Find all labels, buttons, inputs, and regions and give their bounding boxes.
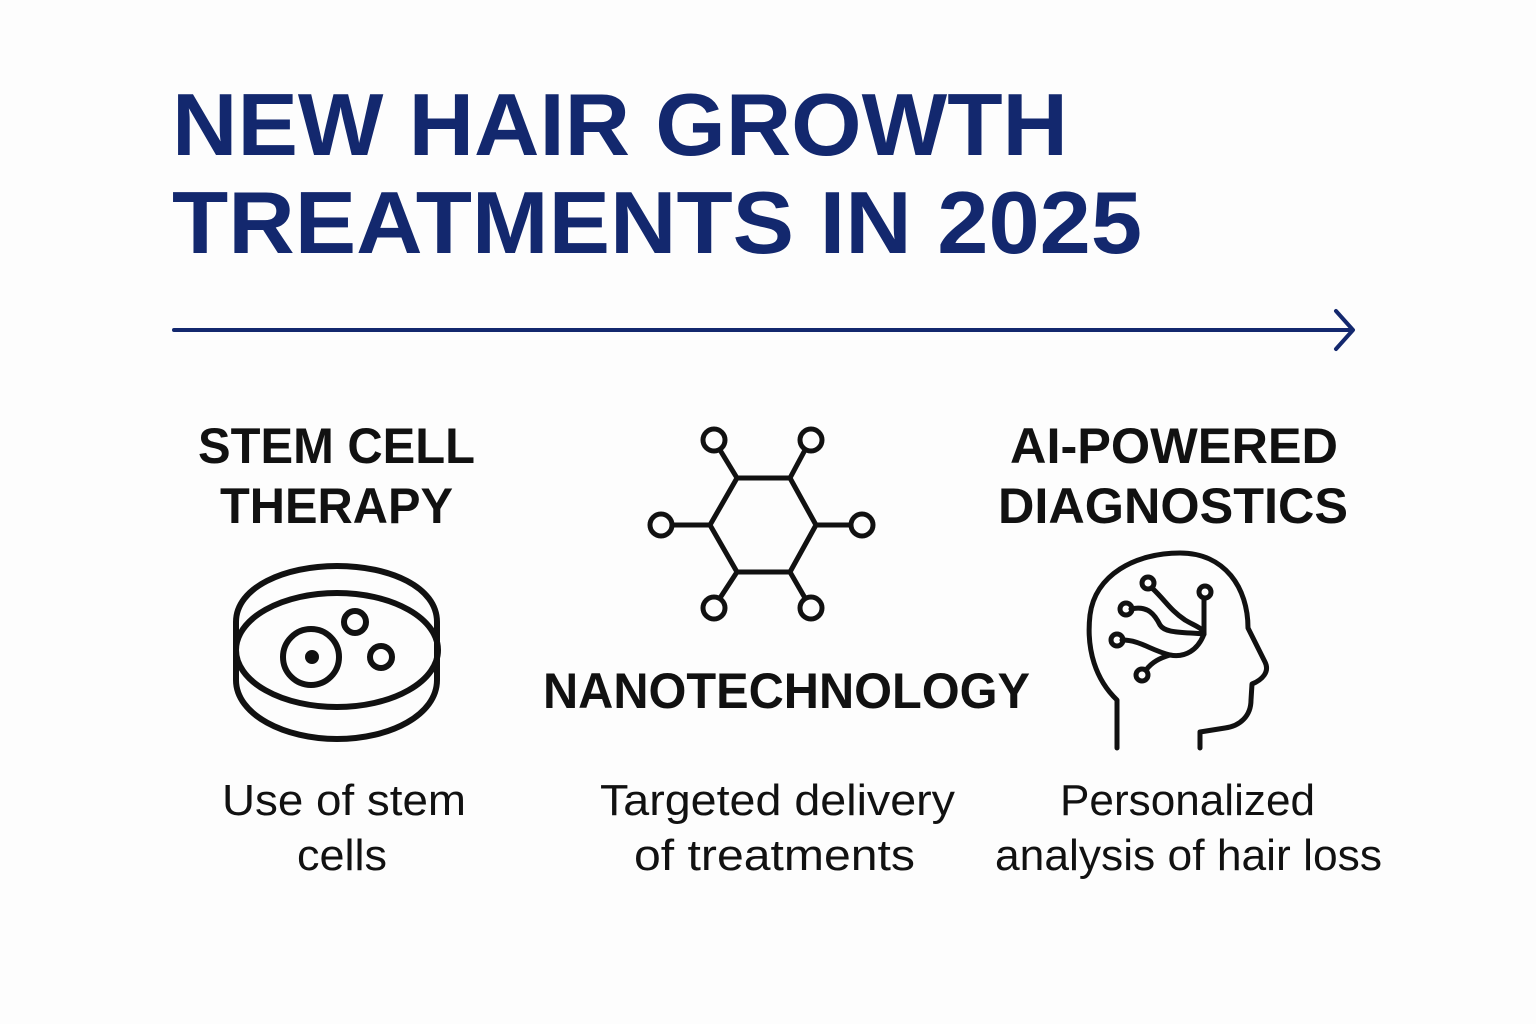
heading: stem cell therapy [198,418,475,534]
arrow: timeline [174,311,1353,349]
text: AI diagnostics description: analysis of hair loss [995,831,1382,880]
text: nanotechnology description: Targeted delivery [600,776,955,825]
heading: stem cell therapy: THERAPY [220,478,453,534]
icon: head with circuit brain [1089,553,1267,748]
text: nanotechnology description [600,776,955,880]
text: AI diagnostics description [995,776,1382,880]
title: NEW HAIR GROWTH [172,75,1068,174]
heading: nanotechnology: NANOTECHNOLOGY [543,663,1030,719]
heading: stem cell therapy: STEM CELL [198,418,475,474]
panel: nanotechnology [543,429,1030,880]
title [172,75,1142,272]
heading: AI-powered diagnostics: DIAGNOSTICS [998,478,1348,534]
title: TREATMENTS IN 2025 [172,173,1142,272]
text: stem cell description: cells [297,831,387,880]
icon: petri dish [236,566,438,739]
heading: AI-powered diagnostics: AI-POWERED [1010,418,1338,474]
panel: AI-powered diagnostics [995,418,1382,880]
heading: AI-powered diagnostics [998,418,1348,534]
panel: stem cell therapy [198,418,475,880]
text: stem cell description [222,776,466,880]
text: AI diagnostics description: Personalized [1060,776,1315,825]
icon: molecule hexagon [650,429,873,619]
text: stem cell description: Use of stem [222,776,466,825]
text: nanotechnology description: of treatments [634,831,915,880]
